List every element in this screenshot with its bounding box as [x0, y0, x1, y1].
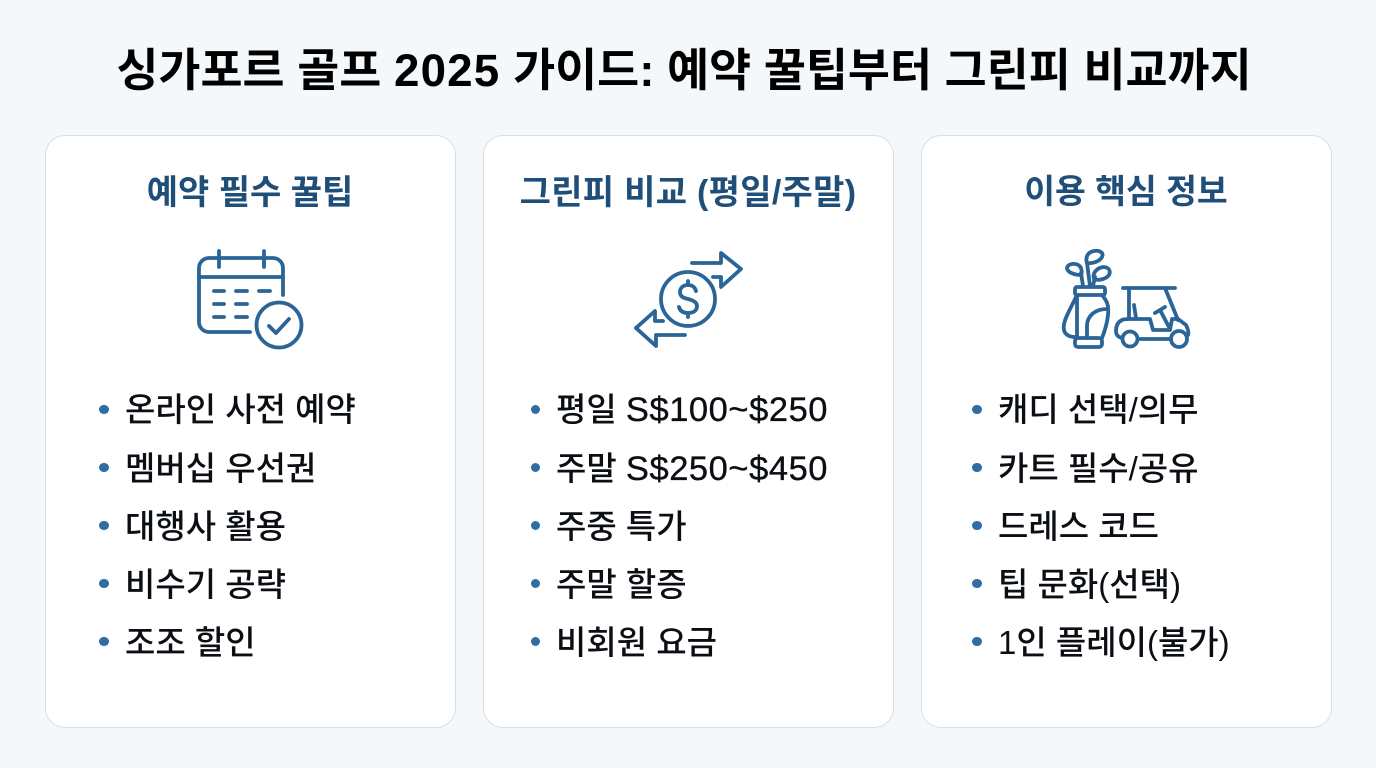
- list: green fees: 주말 S$250~$450: [556, 450, 828, 488]
- list: green fees: 주중 특가: [556, 508, 687, 544]
- list: green fees: 주말 할증: [556, 566, 687, 602]
- list: booking tips: 온라인 사전 예약: [125, 390, 356, 428]
- heading: booking tips: 예약 필수 꿀팁: [147, 174, 353, 212]
- heading: green fee comparison: 그린피 비교 (평일/주말): [520, 174, 856, 212]
- panel: green fee comparison: [483, 135, 894, 728]
- panel: key usage info: [921, 135, 1332, 728]
- list: booking tips: 조조 할인: [125, 624, 256, 660]
- list: green fees: 비회원 요금: [556, 624, 717, 660]
- heading: key usage info: 이용 핵심 정보: [1024, 174, 1228, 211]
- list: usage info: 팁 문화(선택): [998, 566, 1181, 602]
- list: booking tips: 멤버십 우선권: [125, 450, 316, 486]
- title: 싱가포르 골프 2025 가이드: 예약 꿀팁부터 그린피 비교까지: [116, 45, 1252, 96]
- list: usage info: [972, 390, 1230, 661]
- panel: booking tips: [45, 135, 456, 728]
- list: usage info: 캐디 선택/의무: [998, 390, 1198, 428]
- list: usage info: 1인 플레이(불가): [998, 624, 1230, 660]
- list: usage info: 카트 필수/공유: [998, 450, 1198, 486]
- list: green fees: [531, 390, 828, 660]
- list: green fees: 평일 S$100~$250: [556, 390, 828, 428]
- list: usage info: 드레스 코드: [998, 508, 1159, 544]
- list: booking tips: 대행사 활용: [125, 508, 286, 544]
- list: booking tips: [99, 390, 356, 660]
- list: booking tips: 비수기 공략: [125, 566, 286, 602]
